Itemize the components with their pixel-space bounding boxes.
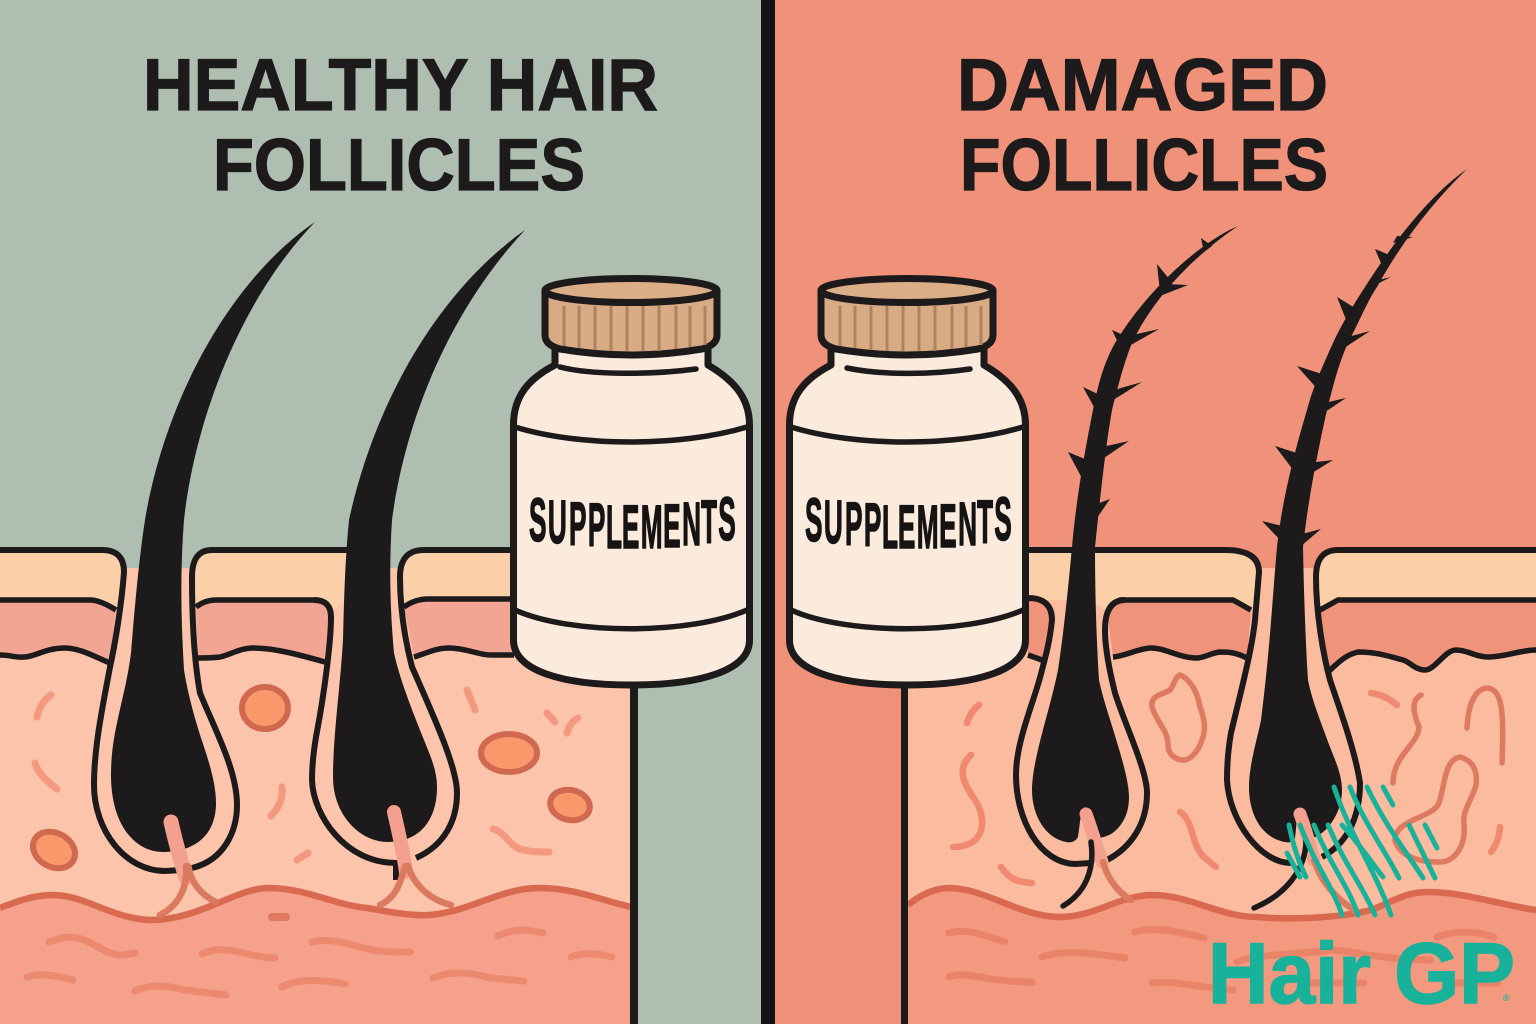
dermis fibres (35, 690, 578, 860)
hair 1: healthy (111, 222, 315, 852)
heading: damaged follicles (957, 45, 1328, 206)
hair 3: damaged with spikes (1032, 226, 1238, 842)
bottle cap (545, 290, 717, 355)
cream epidermis blocks (0, 550, 514, 614)
panel: damaged background (775, 0, 1536, 1024)
follicle 3 top line (1028, 550, 1291, 863)
cap top (821, 278, 993, 302)
heading: damaged follicles: DAMAGED (957, 45, 1328, 126)
bottle body (514, 345, 750, 685)
hair 3 spikes (1068, 238, 1212, 528)
label bottom edge (515, 610, 747, 629)
cap ridges (840, 306, 981, 351)
hair papillae (160, 812, 451, 915)
follicle 1 outline (0, 550, 350, 871)
heading: healthy hair follicles: FOLLICLES (213, 125, 585, 206)
bottle cap (821, 290, 993, 355)
heading: healthy hair follicles: HEALTHY HAIR (143, 45, 658, 126)
logo: Hair GP wordmark (1208, 787, 1515, 1022)
heading: healthy hair follicles (143, 45, 658, 206)
cap top (545, 278, 717, 302)
label text: SUPPLEMENTS (805, 484, 1012, 561)
skin line: wavy boundary (908, 888, 1536, 918)
lower skin layer (0, 888, 631, 1024)
bottle neck line (847, 368, 970, 373)
hair 4 stem and bulb (1249, 169, 1467, 842)
follicle 3 outline (1016, 598, 1147, 864)
label text: SUPPLEMENTS (529, 484, 736, 561)
dermis fibres (953, 693, 1500, 883)
panel: healthy background (0, 0, 761, 1024)
pink skin blocks (1028, 598, 1536, 672)
label bottom edge (791, 610, 1023, 629)
bottle body (790, 345, 1026, 685)
cap ridges (564, 306, 705, 351)
hair papillae and broken roots (1063, 814, 1354, 910)
label top edge (791, 427, 1023, 442)
cream epidermis blocks (1028, 550, 1536, 610)
pink skin blocks (0, 599, 514, 663)
bottle: right supplements (790, 278, 1026, 685)
skin lines: epidermis boundaries (1028, 600, 1536, 672)
lower layer fibres (949, 930, 1498, 990)
label top edge (515, 427, 747, 442)
hair 4: damaged with spikes (1249, 169, 1467, 842)
logo stripes (1287, 787, 1437, 915)
panel: healthy skin cross-section (0, 222, 631, 1024)
lower layer fibres (27, 917, 612, 995)
dermis layer (0, 568, 631, 918)
registered mark: ® (1503, 993, 1510, 1003)
skin line: wavy boundary (0, 888, 631, 920)
stem line: left bottle (630, 685, 638, 1024)
follicle 4 outline (1316, 550, 1536, 857)
bottle: left supplements (514, 278, 750, 685)
hair 2: healthy (333, 230, 525, 842)
hair 4 spikes (1262, 236, 1413, 552)
centre divider (761, 0, 775, 1024)
panel: damaged skin cross-section (908, 169, 1536, 1024)
heading: damaged follicles: FOLLICLES (960, 125, 1328, 206)
dermis layer (908, 568, 1536, 918)
follicle 2 outline (312, 550, 514, 880)
hair 3 stem and bulb (1032, 226, 1238, 842)
stem line: right bottle (901, 685, 908, 1024)
deformed tissue loops (1152, 675, 1503, 862)
skin lines: epidermis boundaries (0, 599, 514, 663)
logo text: Hair GP (1208, 926, 1515, 1022)
lower skin layer (908, 888, 1536, 1024)
fat cells (27, 687, 593, 875)
bottle neck line (560, 367, 696, 373)
